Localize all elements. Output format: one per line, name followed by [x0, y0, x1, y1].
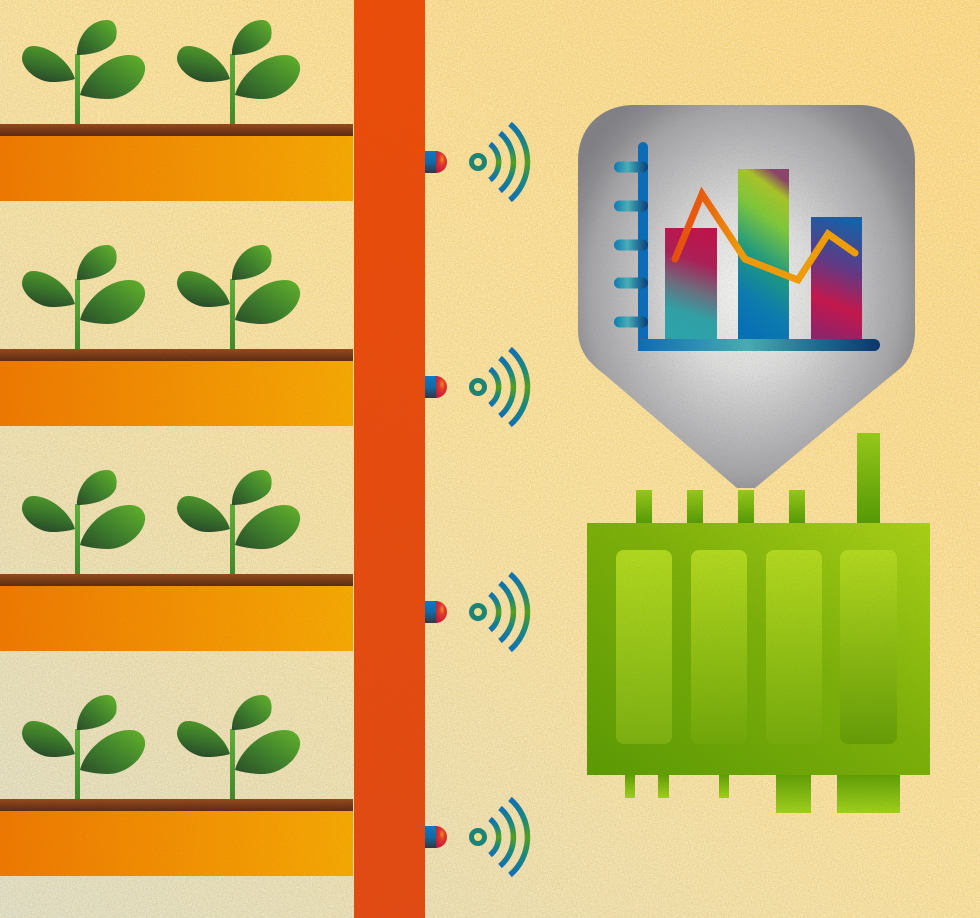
panel: planting row 4	[0, 695, 353, 876]
icon: sensor and wireless signal, row 2	[425, 349, 528, 425]
icon: seedling	[177, 695, 300, 799]
axis ticks	[614, 162, 648, 328]
icon: seedling	[177, 20, 300, 124]
panel: planting row 2	[0, 245, 353, 426]
x axis	[638, 339, 880, 351]
callout: data bubble with chart	[578, 105, 915, 488]
trend line	[675, 194, 855, 280]
y axis	[638, 142, 648, 351]
icon: sensor and wireless signal, row 4	[425, 799, 528, 875]
orange planter	[0, 136, 353, 201]
icon: sensor and wireless signal, row 1	[425, 124, 528, 200]
transformer body	[587, 523, 930, 775]
bar 2	[738, 169, 789, 339]
bar 1	[665, 228, 717, 339]
soil strip	[0, 574, 353, 586]
bar 3	[811, 217, 862, 339]
bar chart	[614, 142, 880, 351]
panel: planting row 3	[0, 470, 353, 651]
bottom feet	[625, 775, 900, 813]
icon: seedling	[22, 20, 145, 124]
orange planter	[0, 811, 353, 876]
orange planter	[0, 586, 353, 651]
icon: seedling	[177, 470, 300, 574]
soil strip	[0, 349, 353, 361]
icon: seedling	[22, 245, 145, 349]
bubble shape	[578, 105, 915, 488]
soil strip	[0, 799, 353, 811]
soil strip	[0, 124, 353, 136]
icon: seedling	[177, 245, 300, 349]
red vertical pipe	[354, 0, 425, 918]
icon: seedling	[22, 470, 145, 574]
icon: seedling	[22, 695, 145, 799]
icon: transformer	[587, 433, 930, 813]
icon: sensor and wireless signal, row 3	[425, 574, 528, 650]
cooling panels	[616, 550, 897, 744]
top terminals	[636, 433, 880, 523]
orange planter	[0, 361, 353, 426]
panel: planting row 1	[0, 20, 353, 201]
